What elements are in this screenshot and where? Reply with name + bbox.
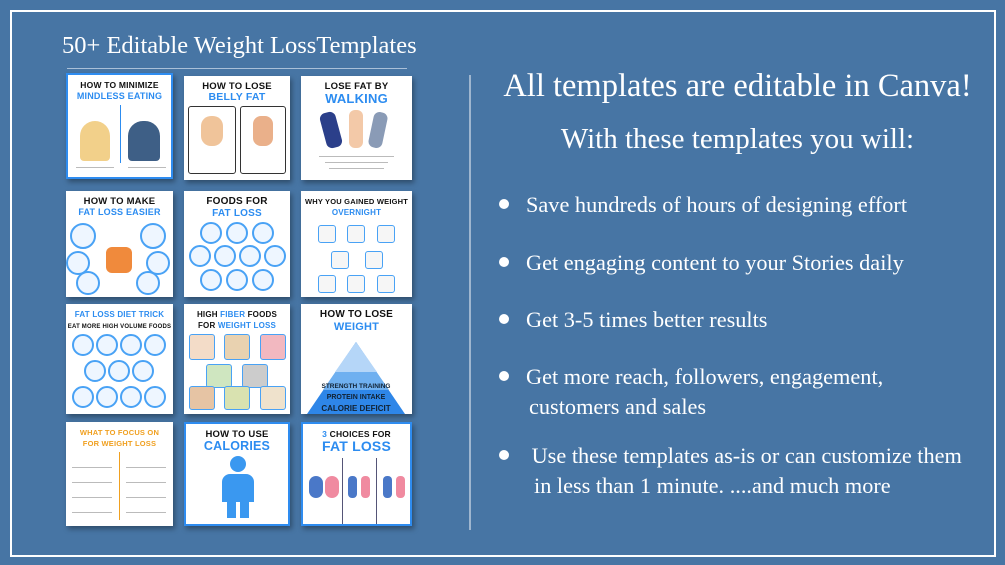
- tile: calories: HOW TO USE: [205, 429, 269, 440]
- tile: focus on: FOR WEIGHT LOSS: [83, 439, 156, 448]
- tile: fat loss easier: [66, 191, 173, 297]
- tile: foods for fat loss: FAT LOSS: [212, 208, 262, 219]
- tile: fat loss easier: FAT LOSS EASIER: [78, 207, 161, 217]
- tile: belly fat: [184, 76, 290, 180]
- divider: [469, 75, 471, 530]
- tile: belly fat: BELLY FAT: [208, 91, 266, 103]
- tile: pyramid: WEIGHT: [334, 321, 379, 333]
- thumbnail grid: [65, 73, 417, 532]
- bullet 3: Get 3-5 times better results: [526, 307, 768, 332]
- tile: walking: LOSE FAT BY: [325, 81, 388, 92]
- bullet 1: Save hundreds of hours of designing effort: [526, 192, 907, 217]
- bullet 2: Get engaging content to your Stories daily: [526, 250, 904, 275]
- tile: 3 choices: [301, 422, 412, 526]
- bullet 5: Use these templates as-is or can customize them: [532, 443, 962, 468]
- tile: walking: [301, 76, 412, 180]
- tile: belly fat: HOW TO LOSE: [202, 81, 272, 92]
- tile: gained weight overnight: OVERNIGHT: [332, 208, 381, 217]
- tile: foods for fat loss: FOODS FOR: [206, 196, 268, 207]
- tile: mindless eating: MINDLESS EATING: [77, 91, 162, 101]
- tile: fat loss easier: HOW TO MAKE: [84, 196, 155, 207]
- bullet 4: [499, 364, 883, 419]
- title: left: 50+ Editable Weight LossTemplates: [62, 32, 417, 59]
- tile: mindless eating: [66, 73, 173, 179]
- tile: gained weight overnight: [301, 191, 412, 297]
- tile: 3 choices: 3 CHOICES FOR: [322, 429, 391, 439]
- tile: gained weight overnight: WHY YOU GAINED WEIGHT: [305, 197, 408, 206]
- tile: foods for fat loss: [184, 191, 290, 297]
- tile: pyramid: STRENGTH TRAINING: [322, 383, 390, 390]
- tile: diet trick: EAT MORE HIGH VOLUME FOODS: [68, 324, 171, 330]
- subheading: With these templates you will:: [561, 123, 914, 155]
- bullet 4: customers and sales: [529, 394, 706, 419]
- tile: pyramid: HOW TO LOSE: [320, 309, 393, 320]
- tile: high fiber: [184, 304, 290, 414]
- tile: pyramid: CALORIE DEFICIT: [321, 404, 391, 413]
- tile: mindless eating: HOW TO MINIMIZE: [80, 80, 159, 90]
- tile: diet trick: [66, 304, 173, 414]
- tile: high fiber: HIGH FIBER FOODS: [197, 310, 277, 319]
- bullet 5: in less than 1 minute. ....and much more: [534, 473, 891, 498]
- tile: focus on: WHAT TO FOCUS ON: [80, 428, 159, 437]
- tile: pyramid: [301, 304, 412, 414]
- heading: editable in Canva: All templates are editable in Canva!: [503, 68, 972, 104]
- tile: walking: WALKING: [325, 91, 388, 106]
- tile: calories: CALORIES: [204, 439, 270, 453]
- tile: focus on: [66, 422, 173, 526]
- bullet 4: Get more reach, followers, engagement,: [526, 364, 883, 389]
- tile: diet trick: FAT LOSS DIET TRICK: [75, 310, 164, 319]
- bullet 5: [499, 443, 962, 498]
- tile: 3 choices: FAT LOSS: [322, 438, 391, 454]
- tile: calories: [184, 422, 290, 526]
- tile: high fiber: FOR WEIGHT LOSS: [198, 321, 276, 330]
- tile: pyramid: PROTEIN INTAKE: [327, 394, 386, 401]
